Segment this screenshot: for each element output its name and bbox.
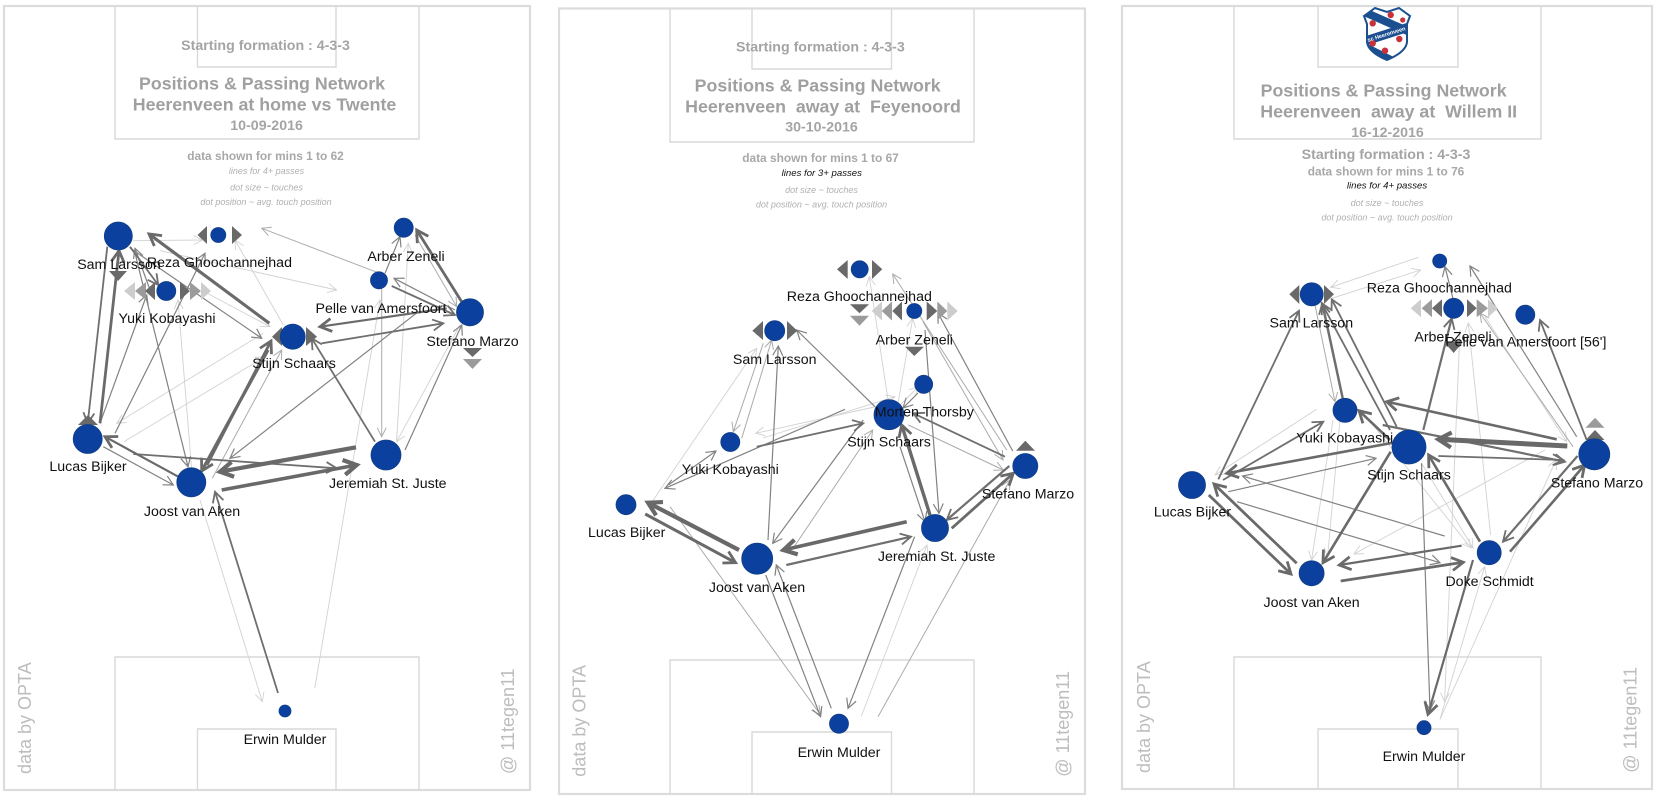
player: Doke Schmidt (1477, 541, 1501, 565)
player: Pelle van Amersfoort (1516, 305, 1535, 324)
player: Erwin Mulder (279, 705, 291, 717)
player: Reza Ghoochannejhad (198, 226, 242, 244)
player name labels: Joost van Aken (709, 580, 805, 596)
player: Pelle van Amersfoort (370, 272, 388, 289)
notes block: dot position ~ avg. touch position (200, 197, 332, 207)
player name labels: Yuki Kobayashi (118, 311, 216, 327)
passing network arrows (1209, 257, 1587, 719)
heading block: Positions & Passing Network (1261, 80, 1507, 100)
player name labels: Stefano Marzo (426, 334, 519, 350)
player: Yuki Kobayashi (721, 432, 740, 452)
heading block: Starting formation : 4-3-3 (181, 38, 350, 54)
player: Stefano Marzo (456, 299, 484, 369)
player name labels: Reza Ghoochannejhad (147, 255, 292, 271)
credit: 11tegen11: @ 11tegen11 (498, 668, 518, 774)
player name labels: Lucas Bijker (1154, 505, 1231, 521)
notes block: Starting formation : 4-3-3 (1302, 147, 1470, 163)
notes block: dot position ~ avg. touch position (1321, 212, 1453, 222)
player name labels: Yuki Kobayashi (1296, 430, 1393, 446)
player name labels: Jeremiah St. Juste (329, 476, 447, 492)
player name labels: Stijn Schaars (847, 435, 931, 451)
player name labels: Lucas Bijker (588, 525, 666, 541)
player: Yuki Kobayashi (124, 282, 211, 300)
notes block (187, 149, 344, 207)
player name labels: Sam Larsson (733, 352, 816, 368)
notes block (1302, 147, 1470, 222)
notes block: data shown for mins 1 to 67 (742, 151, 899, 165)
player name labels: Pelle van Amersfoort [56'] (1445, 334, 1606, 350)
player name labels: Sam Larsson (77, 257, 161, 273)
notes block: lines for 3+ passes (782, 168, 862, 179)
player: Erwin Mulder (1417, 721, 1431, 735)
player name labels: Arber Zeneli (876, 332, 953, 348)
heading block: 30-10-2016 (785, 120, 858, 136)
player: Joost van Aken (177, 468, 206, 497)
player: Arber Zeneli (1411, 298, 1498, 353)
heading block: Positions & Passing Network (695, 76, 941, 96)
notes block: data shown for mins 1 to 76 (1308, 164, 1465, 178)
passing network arrows (88, 228, 462, 702)
player: Reza Ghoochannejhad (1433, 254, 1447, 268)
passing network arrows (645, 274, 1013, 717)
player name labels: Jeremiah St. Juste (878, 549, 995, 565)
player: Yuki Kobayashi (1333, 398, 1357, 422)
pitch outline and boxes (4, 6, 530, 790)
player: Sam Larsson (104, 222, 132, 281)
player name labels: Arber Zeneli (367, 249, 445, 265)
credit: 11tegen11: @ 11tegen11 (1621, 667, 1641, 773)
heading block: 16-12-2016 (1351, 125, 1424, 141)
heading block: Positions & Passing Network (139, 74, 385, 94)
player: Arber Zeneli (872, 302, 958, 356)
icon: sc Heerenveen club crest: sc Heerenveen (1367, 26, 1407, 44)
player name labels: Erwin Mulder (244, 732, 327, 748)
notes block: lines for 4+ passes (1347, 181, 1427, 192)
credit: 11tegen11: @ 11tegen11 (1053, 671, 1073, 777)
heading block: Starting formation : 4-3-3 (736, 40, 905, 56)
player: Jeremiah St. Juste (371, 440, 401, 470)
player: Sam Larsson (752, 321, 797, 341)
player name labels: Reza Ghoochannejhad (1367, 281, 1512, 297)
credit: data by OPTA: data by OPTA (570, 665, 590, 777)
player name labels: Lucas Bijker (49, 459, 127, 475)
player: Stefano Marzo (1013, 441, 1038, 478)
player name labels: Stijn Schaars (252, 356, 336, 372)
notes block: dot size ~ touches (1351, 198, 1424, 208)
player name labels (1154, 281, 1643, 765)
player name labels: Doke Schmidt (1445, 574, 1534, 590)
player name labels: Stefano Marzo (982, 487, 1074, 503)
player name labels: Arber Zeneli (1414, 330, 1492, 346)
credit: data by OPTA: data by OPTA (15, 662, 35, 774)
player name labels (588, 289, 1074, 761)
player: Erwin Mulder (830, 714, 848, 733)
heading block (685, 40, 961, 136)
player: Stijn Schaars (874, 400, 904, 430)
heading block (1260, 80, 1517, 141)
player name labels: Erwin Mulder (1383, 749, 1466, 765)
player: Reza Ghoochannejhad (837, 260, 882, 326)
player: Morten Thorsby (915, 375, 933, 393)
player name labels: Pelle van Amersfoort (316, 301, 447, 317)
player: Stijn Schaars (1392, 430, 1426, 464)
notes block: dot size ~ touches (230, 182, 303, 192)
player: Jeremiah St. Juste (922, 514, 948, 542)
player: Lucas Bijker (1178, 472, 1206, 498)
heading block: Heerenveen at home vs Twente (133, 94, 396, 114)
pitch outline and boxes (559, 8, 1085, 794)
heading block: Heerenveen away at Willem II (1260, 102, 1517, 122)
player: Lucas Bijker (616, 495, 636, 515)
icon: sc Heerenveen club crest (1362, 8, 1412, 64)
player name labels: Stijn Schaars (1367, 467, 1451, 483)
player: Joost van Aken (742, 543, 773, 574)
player: Lucas Bijker (73, 415, 102, 454)
player name labels (49, 249, 519, 748)
player: Arber Zeneli (394, 218, 413, 237)
notes block: data shown for mins 1 to 62 (187, 149, 344, 163)
player: Stefano Marzo (1579, 418, 1610, 470)
panel: Heerenveen away at Feyenoord (559, 8, 1085, 794)
panel: Heerenveen at home vs Twente (4, 6, 530, 790)
player name labels: Morten Thorsby (875, 405, 975, 421)
player name labels: Erwin Mulder (798, 745, 881, 761)
notes block: lines for 4+ passes (229, 166, 305, 176)
notes block: dot position ~ avg. touch position (756, 200, 887, 210)
player: Stijn Schaars (272, 324, 317, 349)
heading block (133, 38, 396, 134)
notes block: dot size ~ touches (785, 185, 858, 195)
player name labels: Joost van Aken (144, 504, 240, 520)
player name labels: Reza Ghoochannejhad (787, 289, 932, 305)
player name labels: Yuki Kobayashi (682, 462, 779, 478)
player: Sam Larsson (1289, 283, 1334, 306)
notes block (742, 151, 899, 210)
panel: Heerenveen away at Willem II (1122, 6, 1652, 789)
heading block: 10-09-2016 (230, 118, 303, 134)
player name labels: Joost van Aken (1263, 595, 1360, 611)
credit: data by OPTA: data by OPTA (1134, 661, 1154, 773)
heading block: Heerenveen away at Feyenoord (685, 96, 961, 116)
pitch outline and boxes (1122, 6, 1652, 789)
player name labels: Sam Larsson (1270, 316, 1353, 332)
player: Joost van Aken (1299, 561, 1324, 586)
player name labels: Stefano Marzo (1551, 476, 1643, 492)
